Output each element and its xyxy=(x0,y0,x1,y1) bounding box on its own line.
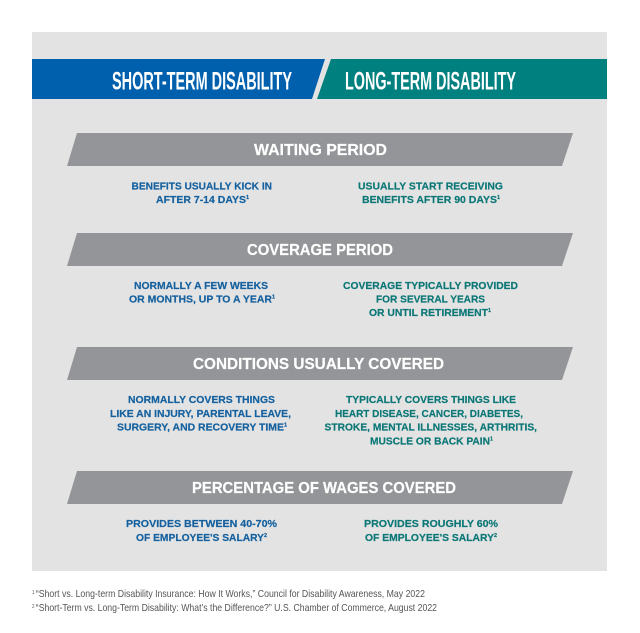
text: long-term wages: PROVIDES ROUGHLY 60% xyxy=(364,518,499,530)
text: long-term waiting period: 1 xyxy=(497,195,500,201)
text: short-term waiting period: 1 xyxy=(246,195,249,201)
text: short-term conditions: NORMALLY COVERS THINGS xyxy=(128,394,275,406)
header band: long-term disability: LONG-TERM DISABILITY xyxy=(345,68,516,96)
text: long-term wages: 2 xyxy=(494,533,497,539)
text: long-term waiting period: USUALLY START RECEIVING xyxy=(358,180,503,192)
text: short-term conditions xyxy=(110,394,291,434)
text: long-term conditions: 1 xyxy=(490,436,493,442)
footnotes: 1 xyxy=(32,590,36,596)
heading bar: percentage of wages covered xyxy=(67,471,573,504)
text: long-term coverage period: FOR SEVERAL YEARS xyxy=(376,294,485,306)
section: conditions usually covered xyxy=(67,347,573,448)
text: long-term wages: OF EMPLOYEE'S SALARY xyxy=(365,532,496,544)
text: long-term conditions: TYPICALLY COVERS THINGS LIKE xyxy=(346,394,516,406)
section: percentage of wages covered xyxy=(67,471,573,544)
header band: short-term disability xyxy=(32,59,325,99)
heading bar: waiting period xyxy=(67,133,573,166)
text: long-term coverage period: OR UNTIL RETIREMENT xyxy=(369,307,490,319)
header band: long-term disability xyxy=(317,59,607,99)
text: short-term conditions: LIKE AN INJURY, PARENTAL LEAVE, xyxy=(110,408,291,420)
footnotes: 2 xyxy=(32,604,36,610)
heading bar: percentage of wages covered: PERCENTAGE OF WAGES COVERED xyxy=(192,480,456,497)
text: long-term coverage period: COVERAGE TYPICALLY PROVIDED xyxy=(343,280,518,292)
text: short-term wages: OF EMPLOYEE'S SALARY xyxy=(136,532,267,544)
footnotes xyxy=(32,588,437,614)
text: short-term waiting period xyxy=(132,180,272,206)
text: long-term coverage period: 1 xyxy=(488,308,491,314)
text: short-term wages: PROVIDES BETWEEN 40-70% xyxy=(126,518,278,530)
text: long-term coverage period xyxy=(343,280,518,319)
text: long-term conditions: MUSCLE OR BACK PAIN xyxy=(370,436,493,448)
text: long-term waiting period: BENEFITS AFTER 90 DAYS xyxy=(362,194,497,206)
text: short-term coverage period: OR MONTHS, UP TO A YEAR xyxy=(129,294,272,306)
heading bar: waiting period: WAITING PERIOD xyxy=(254,142,387,159)
header band: short-term disability: SHORT-TERM DISABILITY xyxy=(112,68,292,96)
heading bar: coverage period xyxy=(67,233,573,266)
text: long-term waiting period xyxy=(358,180,503,206)
text: short-term wages xyxy=(126,518,278,544)
text: long-term wages xyxy=(364,518,499,544)
section: coverage period xyxy=(67,233,573,319)
heading bar: coverage period: COVERAGE PERIOD xyxy=(247,242,393,259)
text: short-term conditions: 1 xyxy=(284,422,287,428)
text: long-term conditions: HEART DISEASE, CANCER, DIABETES, xyxy=(335,408,523,420)
text: long-term conditions: STROKE, MENTAL ILLNESSES, ARTHRITIS, xyxy=(324,422,537,434)
footnotes: “Short-Term vs. Long-Term Disability: What’s the Difference?” U.S. Chamber of Commerce, August 2022 xyxy=(36,602,437,614)
text: short-term coverage period: NORMALLY A FEW WEEKS xyxy=(134,280,268,292)
footnotes: “Short vs. Long-term Disability Insurance: How It Works,” Council for Disability Awareness, May 2022 xyxy=(36,588,425,600)
text: short-term conditions: SURGERY, AND RECOVERY TIME xyxy=(117,422,285,434)
heading bar: conditions usually covered: CONDITIONS USUALLY COVERED xyxy=(193,356,444,373)
text: short-term wages: 2 xyxy=(264,533,267,539)
text: short-term coverage period xyxy=(129,280,275,306)
section: waiting period xyxy=(67,133,573,206)
heading bar: conditions usually covered xyxy=(67,347,573,380)
panel: background xyxy=(32,32,607,571)
text: short-term coverage period: 1 xyxy=(272,294,275,300)
text: short-term waiting period: AFTER 7-14 DAYS xyxy=(156,194,246,206)
text: short-term waiting period: BENEFITS USUALLY KICK IN xyxy=(132,180,272,192)
text: long-term conditions xyxy=(324,394,537,448)
